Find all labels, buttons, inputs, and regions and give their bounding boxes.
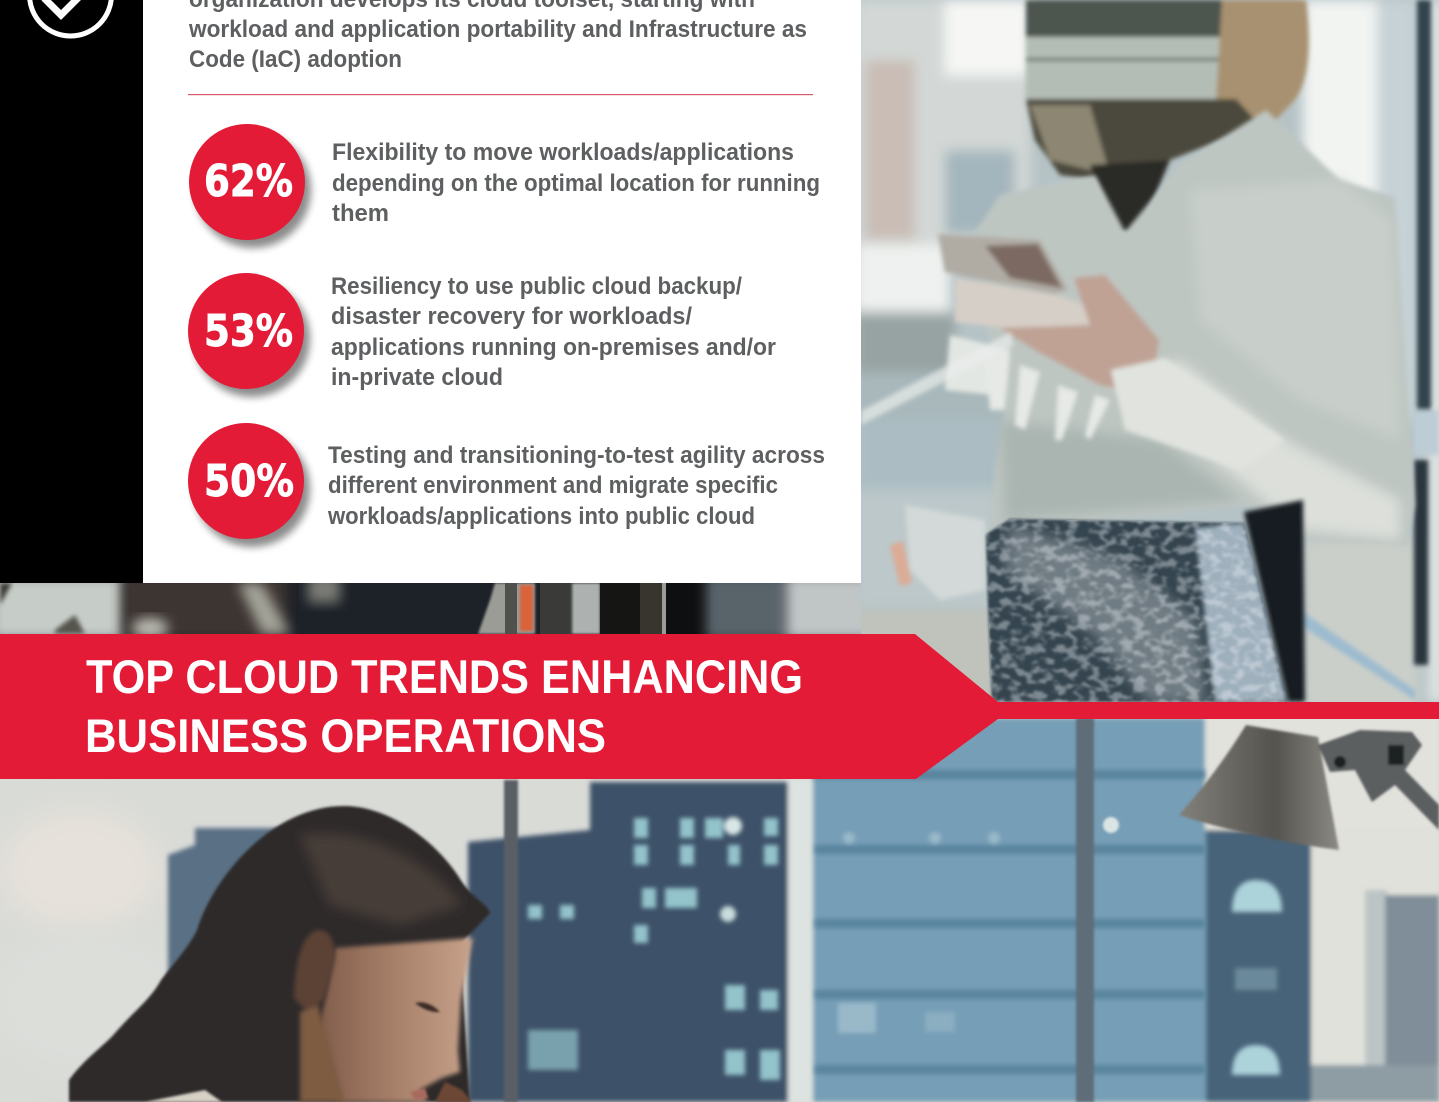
photo: woman at office window with city skyline [0, 718, 1439, 1102]
skirt [985, 500, 1305, 703]
banner: section heading [0, 634, 1439, 779]
stat: 53% resiliency: 53% [204, 306, 293, 357]
shirt [975, 110, 1415, 546]
stat: 62% flexibility [189, 124, 820, 248]
window frames [504, 718, 1119, 1102]
stat: 53% resiliency: disaster recovery for workloads/ [331, 303, 692, 330]
banner: section heading: BUSINESS OPERATIONS [85, 709, 606, 762]
intro text: workload and application portability and Infrastructure as [188, 16, 807, 43]
stat: 62% flexibility: Flexibility to move workloads/applications [332, 139, 794, 166]
stat: 62% flexibility: them [332, 200, 389, 227]
desk lamp [1179, 725, 1439, 850]
windows [528, 817, 780, 1080]
stat: 50% testing: Testing and transitioning-to-test agility across [328, 442, 825, 469]
hair and shelving [1026, 0, 1309, 232]
banner: section heading: TOP CLOUD TRENDS ENHANCING [86, 650, 803, 703]
stat: 53% resiliency: in-private cloud [331, 364, 503, 391]
panel: white content panel [143, 0, 861, 583]
stat: 53% resiliency: applications running on-premises and/or [331, 334, 776, 361]
stat: 62% flexibility: depending on the optimal location for running [332, 170, 820, 197]
photo strip: server room behind panel [0, 583, 861, 634]
phone and hand [938, 234, 1285, 470]
shirt fringes and reflections [861, 332, 1110, 600]
skyline buildings [168, 718, 1439, 1102]
woman: hair, face [69, 806, 490, 1102]
stat: 50% testing: different environment and migrate specific [328, 472, 778, 499]
stat: 53% resiliency [188, 273, 776, 397]
stat: 50% testing [188, 423, 825, 547]
stat: 50% testing: workloads/applications into public cloud [327, 503, 755, 530]
icon: check mark in circle [30, 0, 112, 36]
intro text: Code (IaC) adoption [189, 46, 402, 73]
photo: woman with phone behind glass [861, 0, 1439, 702]
stat: 62% flexibility: 62% [204, 156, 293, 207]
panel: black side strip [0, 0, 144, 583]
window bands on glass tower [815, 770, 1205, 1074]
stat: 53% resiliency: Resiliency to use public cloud backup/ [331, 273, 742, 300]
stat: 50% testing: 50% [204, 456, 294, 507]
lit arched windows [1232, 880, 1282, 1075]
intro text [188, 0, 807, 73]
